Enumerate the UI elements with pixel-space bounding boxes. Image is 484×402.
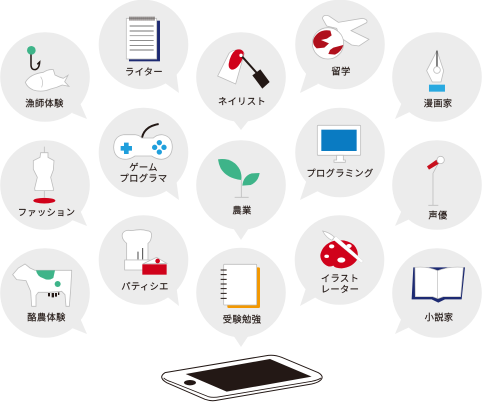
label: 酪農体験	[27, 312, 66, 322]
bubble: イラストレーター	[295, 215, 384, 306]
icon: microphone	[427, 156, 444, 205]
bubble: 農業	[196, 140, 286, 240]
icon: fish and hook	[25, 46, 69, 91]
label: プログラミング	[306, 168, 374, 178]
label: 受験勉強	[223, 314, 262, 324]
label: 留学	[331, 66, 351, 76]
label: 漫画家	[424, 98, 452, 108]
labels	[321, 274, 359, 294]
labels: レーター	[321, 284, 359, 294]
bubble: 酪農体験	[0, 248, 90, 338]
labels: プログラマ	[120, 172, 168, 184]
icon: spiral notebook	[221, 264, 260, 308]
bubble: 漁師体験	[0, 32, 90, 122]
label: ファッション	[18, 208, 75, 218]
label: パティシエ	[121, 282, 169, 292]
illustration: smartphone	[162, 355, 322, 401]
icon: palette	[320, 231, 363, 268]
labels: イラスト	[321, 274, 359, 284]
labels	[120, 162, 168, 184]
icon: open book	[412, 267, 465, 303]
bubble: 漫画家	[392, 32, 482, 122]
icon: cow	[13, 264, 72, 306]
icon: chef hat and cake	[122, 230, 167, 275]
bubble: ゲームプログラマ	[99, 108, 188, 200]
bubble: 留学	[295, 0, 385, 93]
bubble: プログラミング	[295, 108, 385, 200]
icon: game controller	[114, 124, 172, 159]
bubble: 声優	[392, 140, 482, 230]
label: ライター	[125, 67, 163, 77]
bubble: ファッション	[0, 140, 90, 230]
icon: sprout	[218, 159, 260, 197]
bubble: パティシエ	[99, 215, 188, 306]
bubble: ネイリスト	[196, 32, 286, 130]
label: 小説家	[425, 312, 453, 322]
icon: pen nib	[427, 51, 445, 92]
icon: mannequin	[33, 147, 55, 203]
icon: nail polish	[218, 49, 270, 89]
label: 声優	[428, 210, 448, 220]
label: 漁師体験	[25, 98, 64, 108]
bubble: ライター	[99, 0, 188, 93]
icon: monitor	[317, 125, 361, 162]
icon: plane and globe	[312, 15, 369, 59]
bubble: 小説家	[392, 248, 482, 338]
icon: notepad	[126, 17, 160, 61]
bubble: 受験勉強	[196, 248, 286, 347]
label: 農業	[232, 204, 252, 216]
labels: ゲーム	[129, 162, 158, 172]
label: ネイリスト	[218, 96, 266, 106]
